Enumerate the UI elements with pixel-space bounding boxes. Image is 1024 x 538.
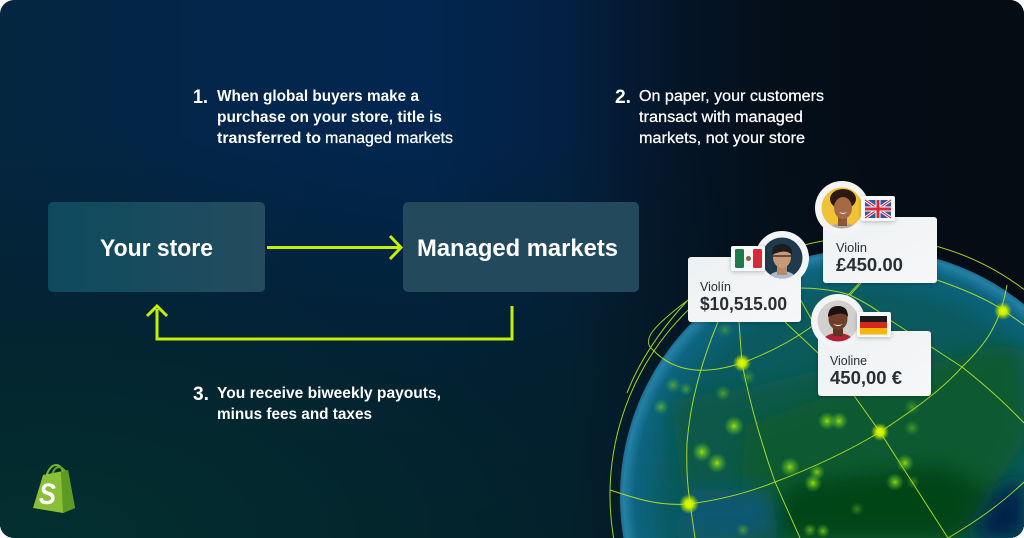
Germany flag bbox=[857, 312, 891, 337]
step 1 text: managed markets bbox=[325, 130, 453, 147]
card: UK buyer bbox=[815, 181, 937, 283]
box: managed markets bbox=[403, 202, 639, 292]
UK flag bbox=[861, 196, 895, 221]
box: your store: Your store bbox=[100, 235, 213, 262]
UK avatar bbox=[815, 181, 866, 228]
Mexico card text: $10,515.00 bbox=[700, 294, 787, 314]
Mexico flag bbox=[731, 246, 765, 271]
step 1 text: purchase on your store, title is bbox=[217, 109, 442, 126]
UK card text: £450.00 bbox=[836, 255, 903, 275]
step 3 text: minus fees and taxes bbox=[217, 406, 372, 423]
step 2 text: transact with managed bbox=[639, 109, 803, 126]
Germany card panel bbox=[818, 331, 931, 396]
step 2 text: On paper, your customers bbox=[639, 88, 824, 105]
Shopify logo: S bbox=[39, 478, 56, 511]
UK card text: Violin bbox=[836, 240, 867, 255]
UK card text bbox=[836, 242, 902, 271]
globe bright nodes bbox=[679, 302, 1012, 514]
box: managed markets: Managed markets bbox=[417, 235, 618, 262]
box: your store bbox=[48, 202, 265, 292]
globe land masses bbox=[670, 345, 1024, 538]
step 3 text: You receive biweekly payouts, bbox=[217, 385, 441, 402]
globe grid lines bbox=[610, 237, 1024, 538]
card: Germany buyer bbox=[811, 294, 931, 396]
Germany card text: 450,00 € bbox=[830, 368, 902, 388]
step 1 text: 1. bbox=[193, 87, 208, 108]
step 2 text: 2. bbox=[615, 87, 631, 108]
step 2 text bbox=[615, 87, 824, 147]
Germany card text bbox=[830, 353, 902, 388]
globe bbox=[610, 237, 1024, 538]
globe body bbox=[620, 249, 1024, 538]
UK card panel bbox=[823, 217, 937, 283]
arrow: payouts back to store bbox=[147, 306, 512, 339]
Mexico avatar bbox=[758, 231, 809, 278]
arrow: store to managed markets bbox=[267, 236, 401, 259]
Mexico card text: Violín bbox=[700, 279, 731, 294]
step 1 text bbox=[193, 87, 453, 147]
Mexico card panel bbox=[688, 257, 801, 322]
step 1 text: When global buyers make a bbox=[217, 88, 419, 105]
step 1 text: transferred to bbox=[217, 130, 321, 147]
Germany avatar bbox=[811, 294, 864, 342]
step 3 text bbox=[194, 386, 440, 419]
Shopify logo bbox=[33, 465, 75, 513]
Mexico card text bbox=[700, 282, 786, 313]
step 2 text: markets, not your store bbox=[639, 130, 805, 147]
globe city lights bbox=[653, 322, 920, 538]
step 3 text: 3. bbox=[193, 384, 209, 405]
card: Mexico buyer bbox=[688, 231, 809, 322]
Germany card text: Violine bbox=[830, 353, 867, 368]
